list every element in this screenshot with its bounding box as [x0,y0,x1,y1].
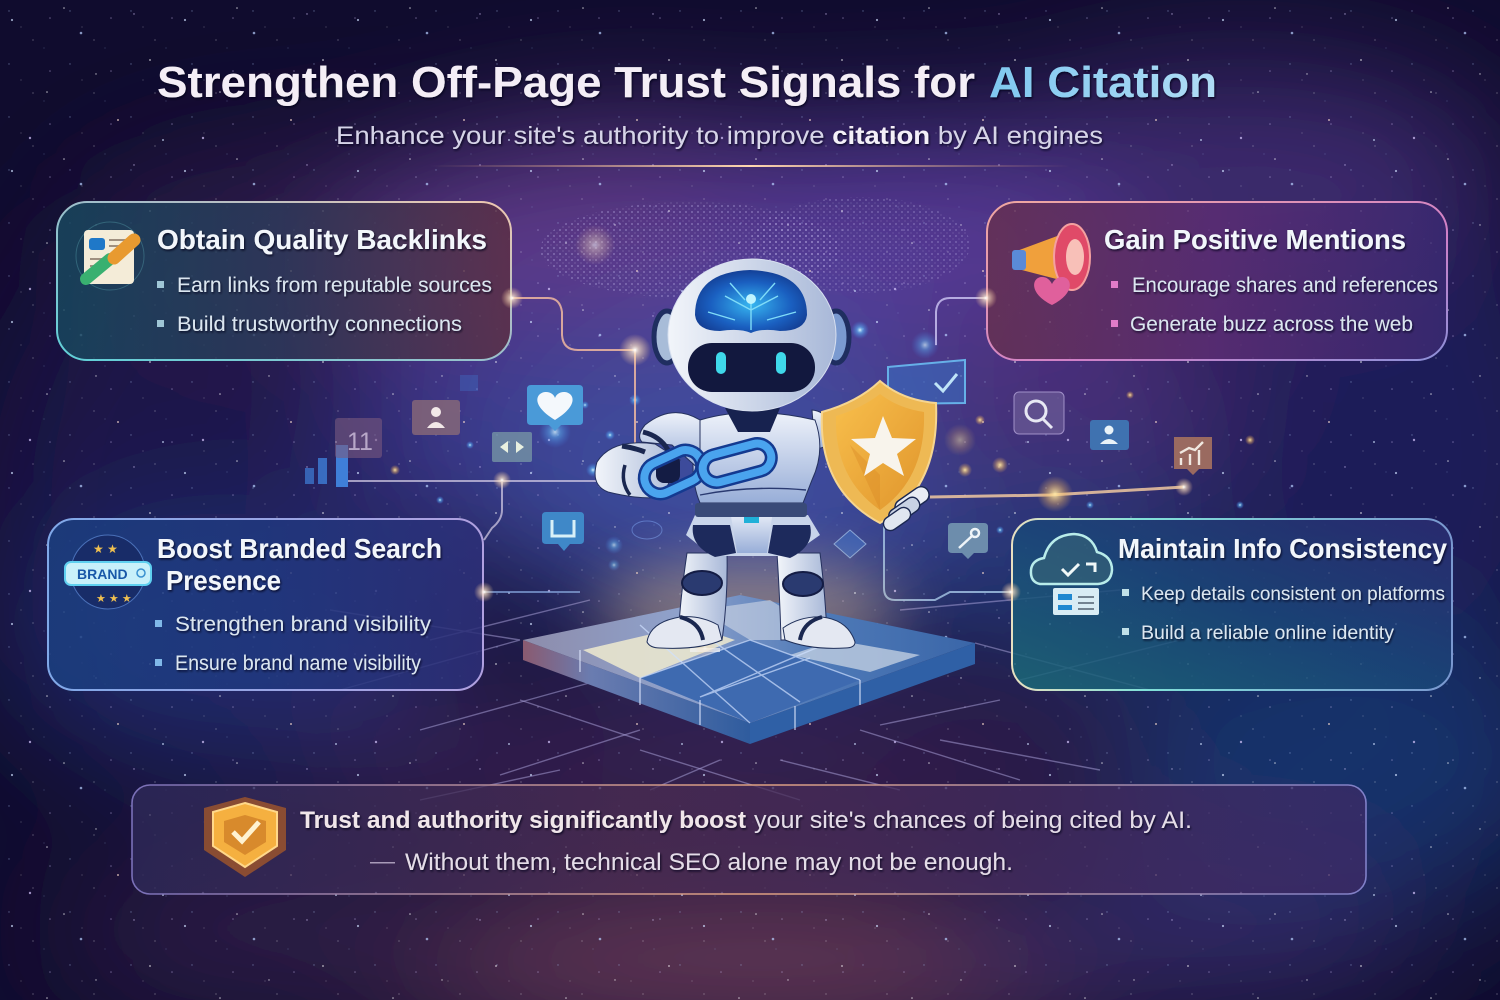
sparkles [390,321,1255,571]
connector: info consistency [884,476,1193,600]
bullet list: Earn links from reputable sources [177,274,492,297]
chain links [639,440,774,499]
connector: backlinks to robot [512,298,651,478]
icon: person card [412,400,460,435]
icon: heart bubble [527,385,583,431]
icon: check tile [888,360,965,404]
panel heading second line: Presence [166,565,281,596]
callout bold text: Trust and authority significantly boost [300,807,746,834]
robot left leg [647,553,727,648]
panel: Gain Positive Mentions [987,202,1447,360]
icon: chat bubble [542,512,584,551]
gold star shield [822,381,936,523]
panel: Obtain Quality Backlinks [57,202,511,360]
node: branded search [474,582,494,602]
title: Strengthen Off-Page Trust Signals for [157,58,975,107]
bullet list: Ensure brand name visibility [175,652,421,675]
icon: megaphone [1012,224,1090,305]
robot [595,259,936,648]
bullet list: Generate buzz across the web [1130,313,1413,336]
bullet list [1111,274,1438,336]
title rule [430,165,1070,167]
icon: chart tile [1174,437,1212,475]
icon: check shield [204,797,286,877]
icon: search tile [1014,392,1064,434]
panel heading: Gain Positive Mentions [1104,224,1406,255]
icon: bar chart [305,375,478,487]
callout dash [370,862,395,864]
subtitle: Enhance your site's authority to improve citation by AI engines [336,122,1103,150]
node: backlinks [501,287,523,309]
icon: brand badge [65,535,151,609]
node: mentions [975,287,997,309]
connector: mentions to robot [936,298,986,345]
connector: branded search [345,471,600,592]
icon: key tile [948,523,988,559]
node: info consistency [1001,582,1021,602]
callout text: your site's chances of being cited by AI. [754,807,1192,834]
icon: person tile [1090,420,1129,450]
callout second line: Without them, technical SEO alone may not be enough. [405,849,1013,876]
panel: Maintain Info Consistency [1012,519,1452,690]
title highlight: AI Citation [989,58,1217,107]
panel: Boost Branded Search Presence [48,519,483,690]
bullet list: Build trustworthy connections [177,313,462,336]
floor grid [330,590,1180,800]
icon: brand badge: BRAND [77,566,128,582]
panel heading: Boost Branded Search [157,533,442,564]
bullet list: Strengthen brand visibility [175,613,432,636]
icon: brand badge: ★ ★ [93,542,118,556]
icon: arrows tile [492,432,532,462]
bullet list [157,274,492,336]
panel heading: Obtain Quality Backlinks [157,224,487,255]
callout: trust and authority [132,785,1366,894]
icon: calendar eleven: 11 [347,428,373,456]
icon: cloud and info card [1031,534,1112,615]
robot shield hand [881,484,932,533]
bullet list: Build a reliable online identity [1141,622,1394,644]
robot far arm [812,410,829,450]
robot pelvis [686,510,820,558]
robot torso [693,408,820,517]
panel heading: Maintain Info Consistency [1118,533,1447,564]
bullet list: Encourage shares and references [1132,274,1438,297]
icon: brand badge: ★ ★ ★ [96,593,132,605]
bullet list [155,613,432,675]
icon: calendar eleven [335,418,382,458]
platform [523,560,975,744]
bullet list [1122,583,1445,644]
robot brain head [654,259,849,411]
robot arm with chain hand [595,413,700,498]
robot right leg [777,553,855,648]
icon: document with link [76,222,144,290]
bullet list: Keep details consistent on platforms [1141,583,1445,605]
